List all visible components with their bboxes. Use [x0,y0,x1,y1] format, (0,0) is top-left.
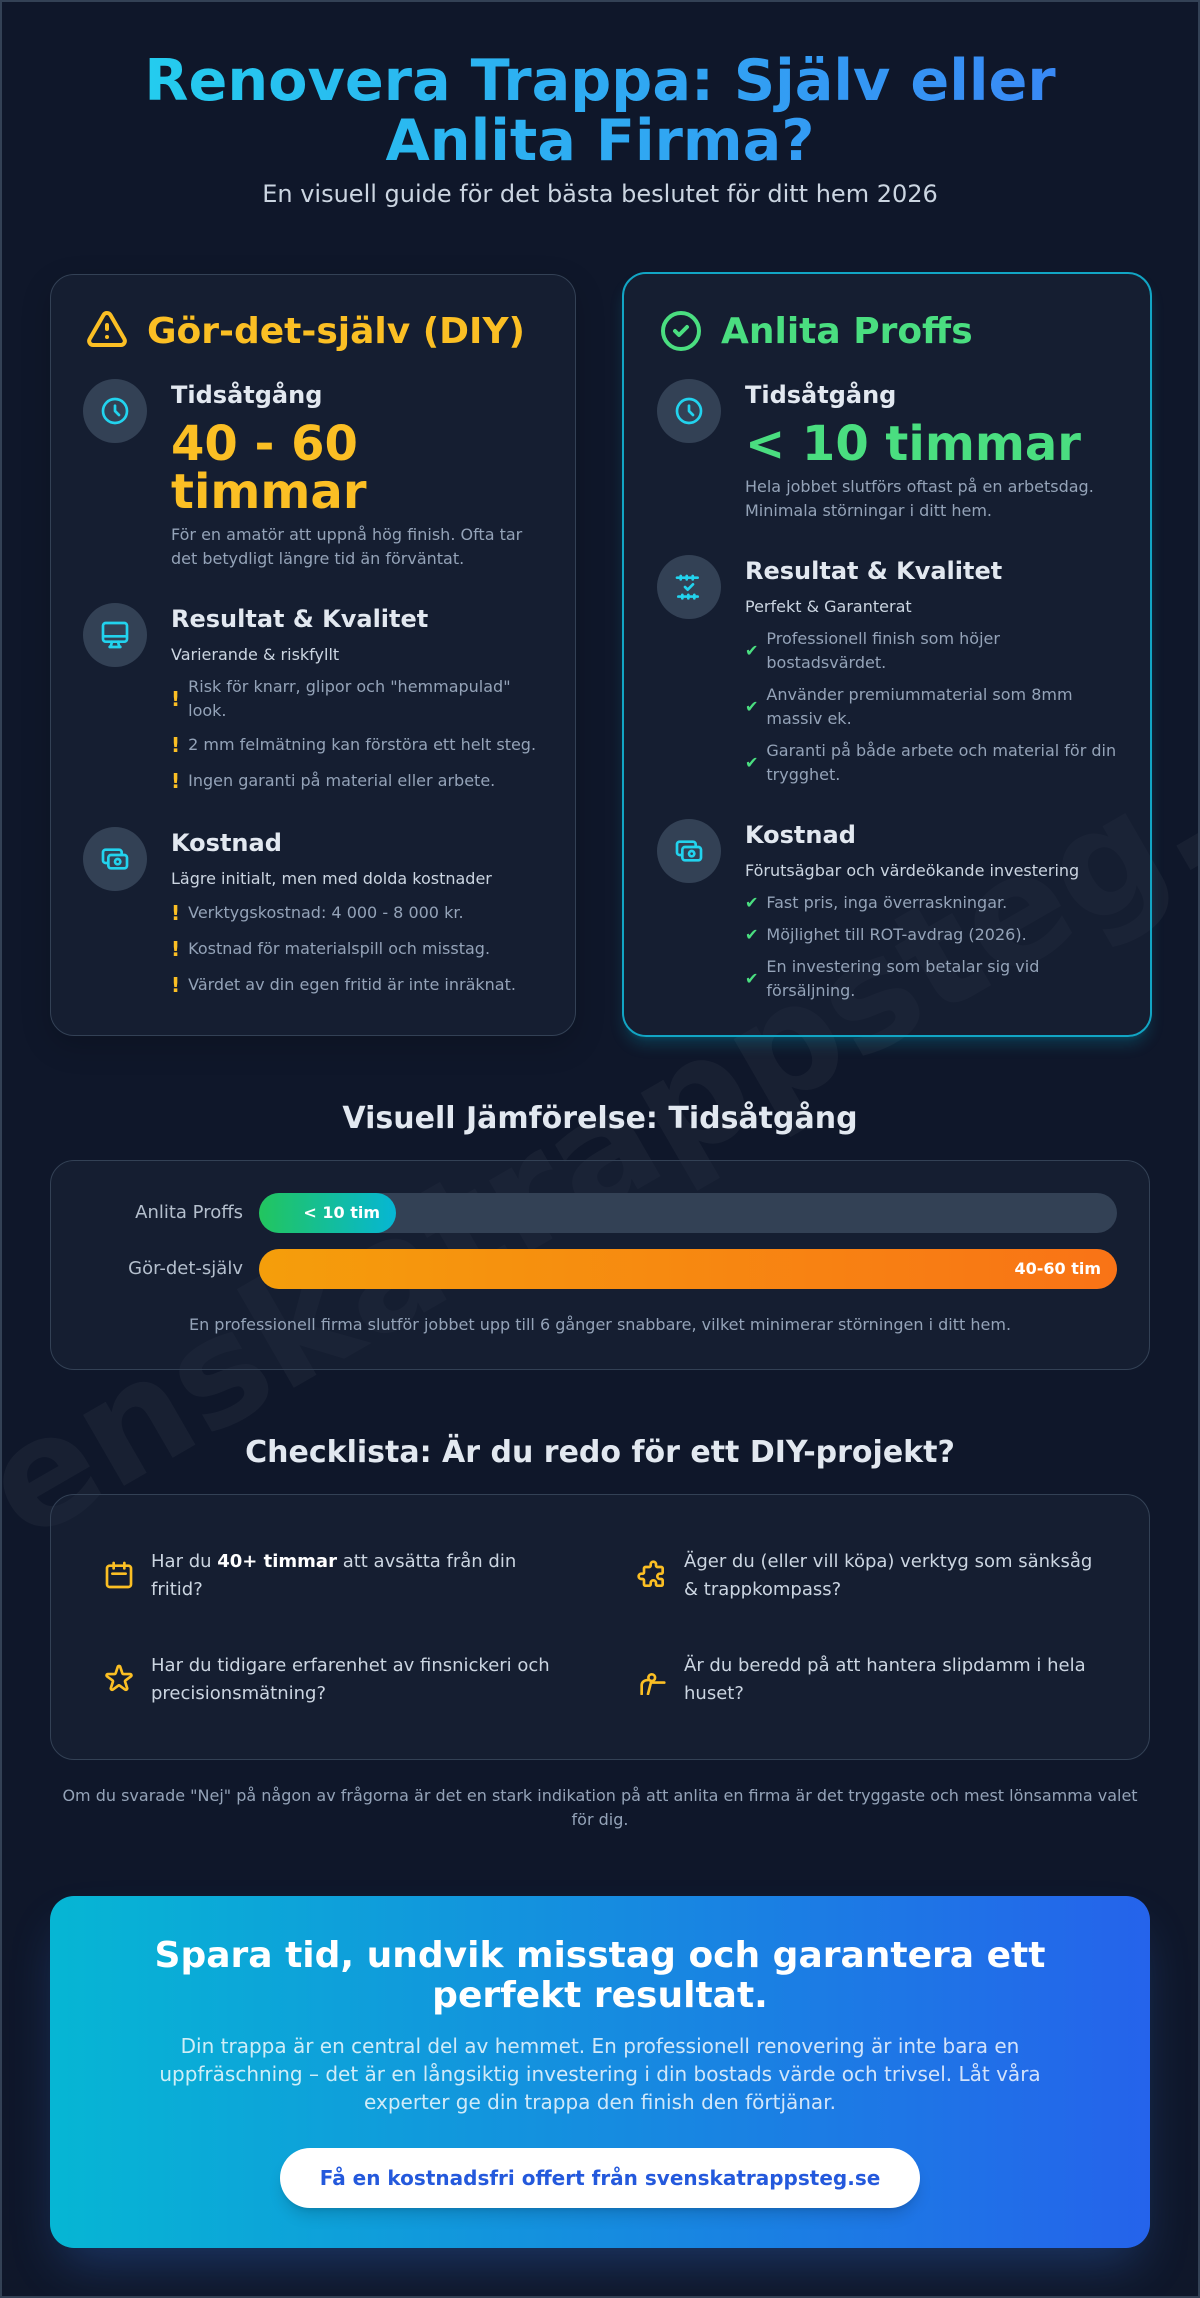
icon: monitor [83,603,147,667]
icon: cash [83,827,147,891]
title [50,51,1150,171]
item: time pro: < 10 timmar [745,416,1081,472]
title: Renovera Trappa: Själv eller [144,47,1056,114]
item: cost pro: En investering som betalar sig vid försäljning. [766,957,1039,1000]
CTA text [159,2034,1041,2114]
footnote: för dig. [572,1810,628,1829]
item: quality DIY: ! [171,687,180,711]
checklist item: time: fritid? [151,1579,203,1600]
checklist item: dust: huset? [684,1683,744,1704]
checklist item: experience: precisionsmätning? [151,1683,326,1704]
bar: professionals [259,1193,1117,1233]
item: cost DIY: Lägre initialt, men med dolda kostnader [171,869,492,888]
icon: clock [657,379,721,443]
item: time pro [657,379,1094,520]
checklist item: experience: Har du tidigare erfarenhet av finsnickeri och [151,1655,550,1676]
CTA text: experter ge din trappa den finish den förtjänar. [364,2090,836,2114]
item: cost DIY: Värdet av din egen fritid är inte inräknat. [188,975,516,994]
item: cost pro: Fast pris, inga överraskningar. [766,893,1007,912]
item: cost pro: ✔ [745,925,758,944]
bar: DIY: 40-60 tim [1014,1259,1101,1278]
item: quality DIY: ! [171,769,180,793]
item: quality pro: Använder premiummaterial som 8mm massiv ek. [766,685,1073,728]
item: time pro: Tidsåtgång [745,381,896,409]
CTA heading [155,1935,1045,2016]
bar: professionals: < 10 tim [303,1203,380,1222]
item: cost pro: Förutsägbar och värdeökande investering [745,861,1079,880]
footnote: Om du svarade "Nej" på någon av frågorna är det en stark indikation på att anlita en firma är det tryggaste och mest lönsamma valet [62,1786,1138,1805]
item: cost DIY: ! [171,937,180,961]
item: quality pro: ✔ [745,697,758,716]
checklist item: dust: Är du beredd på att hantera slipdamm i hela [684,1655,1086,1676]
panel: checklist [50,1494,1150,1760]
checklist item: time [106,1551,516,1600]
CTA heading: Spara tid, undvik misstag och garantera ett [155,1935,1045,1976]
panel: call to action [50,1896,1150,2248]
item: quality DIY: Ingen garanti på material eller arbete. [188,771,495,790]
heading: time comparison: Visuell Jämförelse: Tidsåtgång [342,1101,858,1136]
item: quality DIY [83,603,536,793]
item: cost DIY: Kostnad för materialspill och misstag. [188,939,490,958]
item: cost pro [657,819,1079,1000]
heading: professionals: Anlita Proffs [721,311,973,352]
checklist item: tools: & trappkompass? [684,1579,841,1600]
panel: professionals [622,272,1152,1037]
title: Anlita Firma? [385,107,815,174]
item: cost pro: Kostnad [745,821,856,849]
item: quality pro: Professionell finish som höjer bostadsvärdet. [766,629,1000,672]
item: cost pro: ✔ [745,893,758,912]
item: quality pro: ✔ [745,753,758,772]
item: time pro: Hela jobbet slutförs oftast på en arbetsdag. Minimala störningar i ditt hem. [745,477,1094,520]
subtitle: En visuell guide för det bästa beslutet för ditt hem 2026 [262,180,938,208]
footnote [62,1786,1138,1829]
item: cost DIY: ! [171,973,180,997]
item: cost pro: Möjlighet till ROT-avdrag (2026). [766,925,1027,944]
item: quality pro: ✔ [745,641,758,660]
item: quality pro [657,555,1116,784]
item: time DIY: Tidsåtgång [171,381,322,409]
bar label: DIY: Gör-det-själv [128,1258,243,1279]
item: cost DIY: ! [171,901,180,925]
bar: DIY [259,1249,1117,1289]
item: cost pro: ✔ [745,969,758,988]
checklist item: experience [105,1655,550,1704]
item: quality DIY: Resultat & Kvalitet [171,605,428,633]
item: time DIY [83,379,522,568]
CTA button [280,2148,920,2208]
heading: DIY: Gör-det-själv (DIY) [147,311,525,352]
item: quality DIY: Varierande & riskfyllt [171,645,339,664]
checklist item: tools [637,1550,1092,1600]
CTA button: Få en kostnadsfri offert från svenskatrappsteg.se [320,2166,880,2190]
CTA heading: perfekt resultat. [432,1975,768,2016]
heading: checklist: Checklista: Är du redo för ett DIY-projekt? [245,1435,955,1470]
panel: DIY [50,274,576,1036]
item: cost DIY [83,827,516,997]
CTA text: uppfräschning – det är en långsiktig investering i din bostads värde och trivsel. Låt våra [159,2062,1041,2086]
item: cost DIY: Kostnad [171,829,282,857]
checklist item: dust [640,1654,1086,1704]
item: time DIY: 40 - 60 timmar [171,416,366,520]
item: quality pro: Perfekt & Garanterat [745,597,912,616]
item: quality DIY: Risk för knarr, glipor och "hemmapulad" look. [188,677,511,720]
item: time DIY: För en amatör att uppnå hög finish. Ofta tar det betydligt längre tid än förväntat. [171,525,522,568]
item: quality pro: Resultat & Kvalitet [745,557,1002,585]
icon: checked rows [657,555,721,619]
CTA text: Din trappa är en central del av hemmet. En professionell renovering är inte bara en [181,2034,1019,2058]
icon: cash [657,819,721,883]
icon: clock [83,379,147,443]
item: quality DIY: ! [171,733,180,757]
checklist item: time: Har du 40+ timmar att avsätta från din [151,1551,516,1572]
item: quality DIY: 2 mm felmätning kan förstöra ett helt steg. [188,735,536,754]
bar label: professionals: Anlita Proffs [135,1202,243,1223]
panel: time comparison bar chart [50,1160,1150,1370]
item: quality pro: Garanti på både arbete och material för din trygghet. [766,741,1116,784]
item: cost DIY: Verktygskostnad: 4 000 - 8 000 kr. [188,903,464,922]
checklist item: tools: Äger du (eller vill köpa) verktyg som sänksåg [684,1551,1092,1572]
chart note: En professionell firma slutför jobbet upp till 6 gånger snabbare, vilket minimerar störningen i ditt hem. [189,1315,1011,1334]
